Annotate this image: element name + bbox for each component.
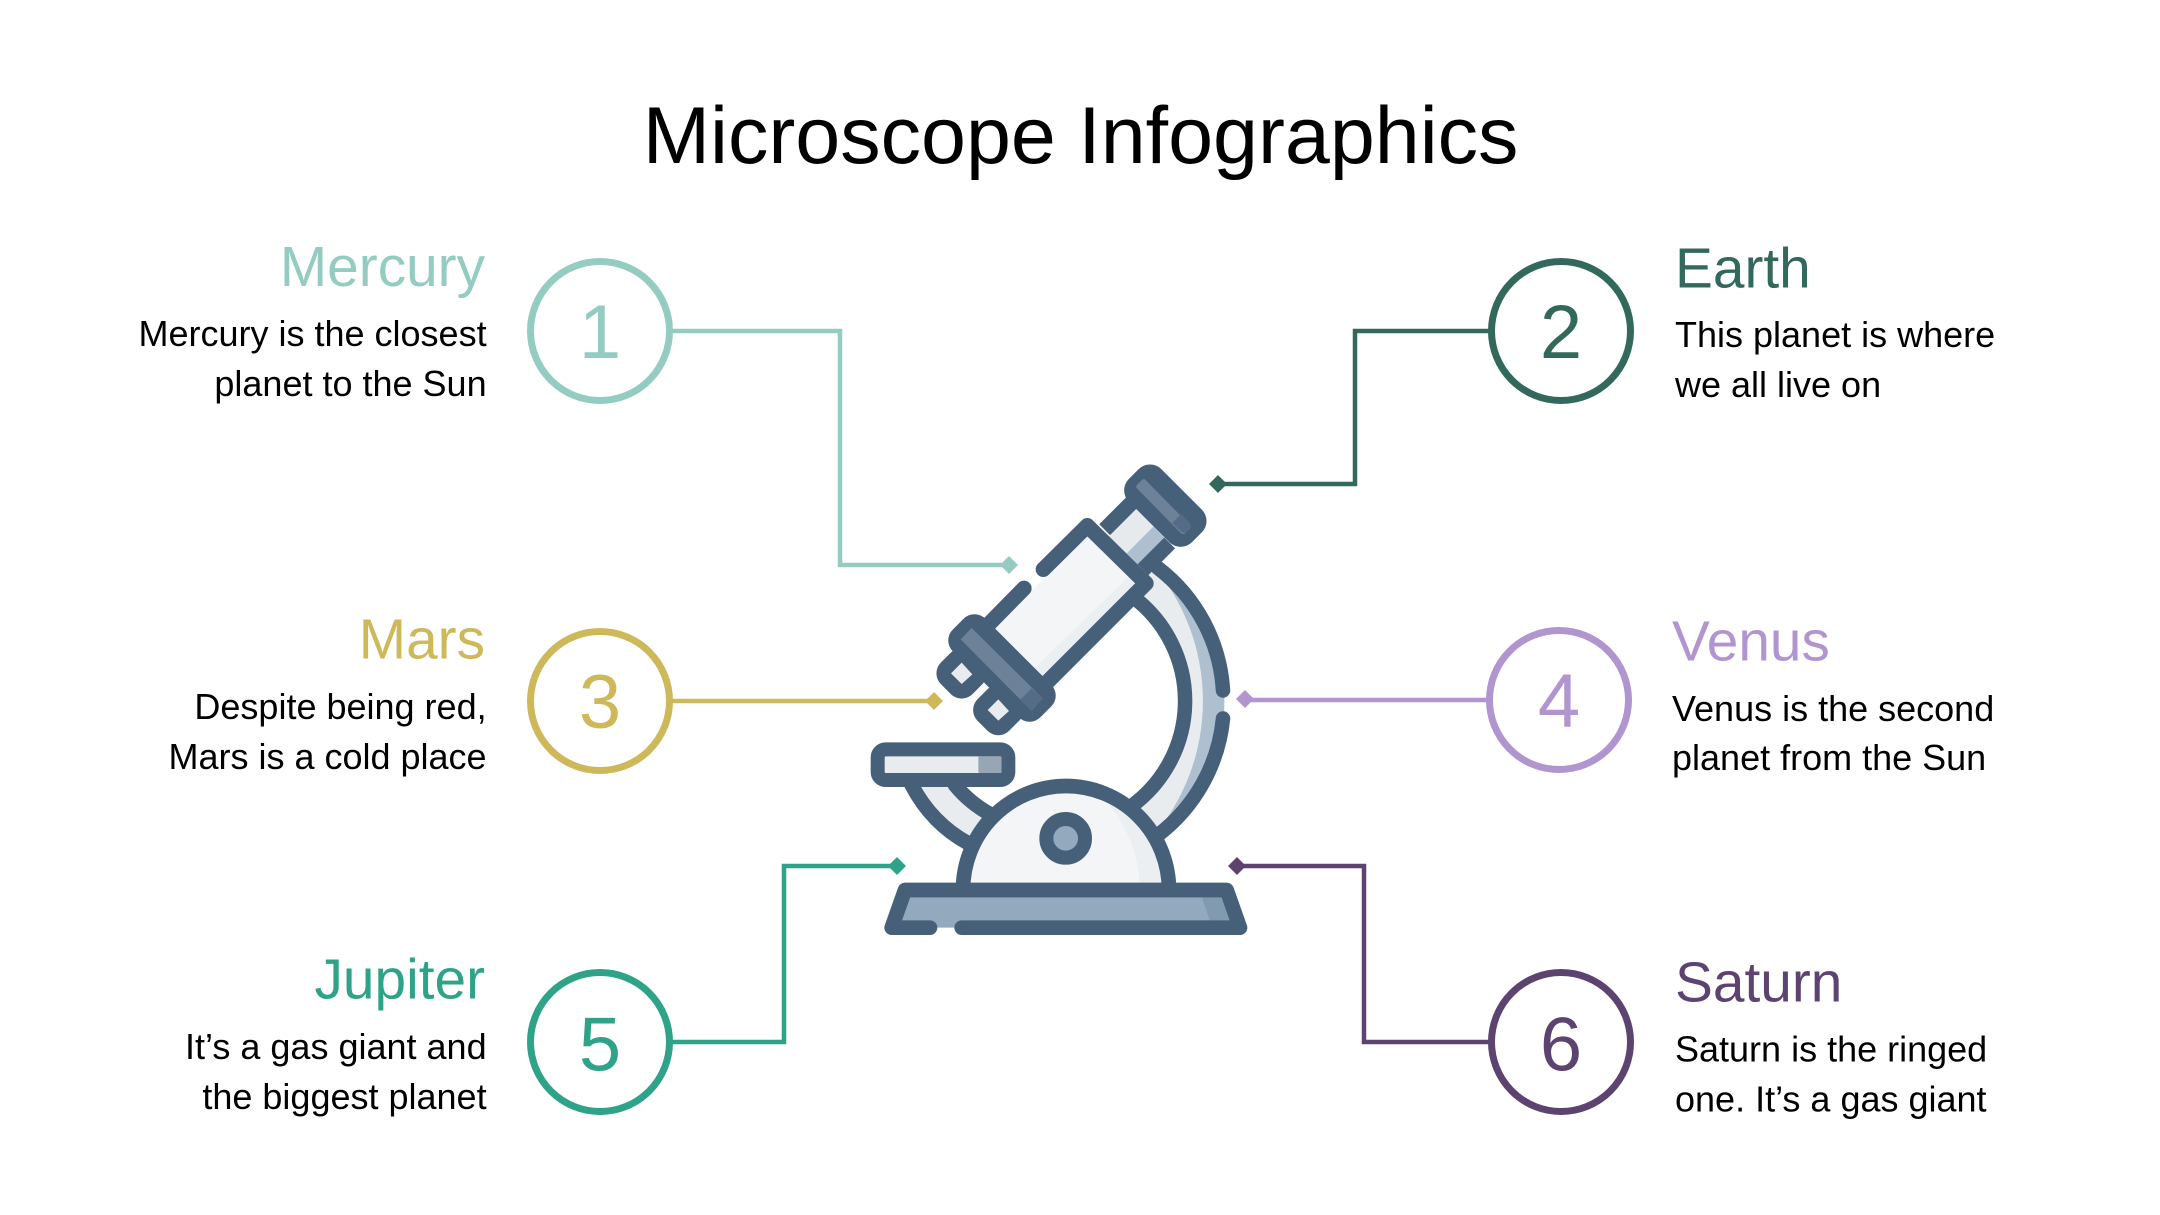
panel: Saturn (1228, 857, 1987, 1120)
eyepiece (1117, 458, 1213, 554)
text: Mars description: Mars is a cold place (168, 736, 487, 777)
panel: Venus (1236, 610, 1994, 778)
heading: Saturn: Saturn (1675, 952, 1842, 1014)
panel: Mercury (138, 236, 1018, 574)
connector 6 (1228, 857, 1491, 1042)
text: Mars description: Despite being red, (194, 686, 487, 727)
connector 3 (672, 692, 943, 710)
base (892, 890, 1240, 928)
objective lenses (930, 642, 1030, 742)
text: Earth description: we all live on (1674, 364, 1881, 405)
connector 2 (1209, 331, 1491, 493)
number circle 3: 3 (579, 660, 621, 745)
heading: Jupiter: Jupiter (315, 948, 485, 1012)
text: Mercury description: planet to the Sun (214, 363, 487, 404)
objective band (942, 608, 1062, 728)
neck (1105, 503, 1170, 570)
text: Venus description: planet from the Sun (1672, 737, 1986, 778)
number circle 1: 1 (579, 290, 621, 375)
panel: Earth (1209, 238, 1995, 493)
heading: Mercury: Mercury (280, 236, 486, 299)
number circle 2: 2 (1540, 290, 1582, 375)
heading: Mars: Mars (359, 608, 485, 672)
connector 5 (672, 857, 906, 1042)
text: Saturn description: Saturn is the ringed (1675, 1028, 1987, 1070)
text: Earth description: This planet is where (1675, 314, 1995, 355)
number circle 2 (1492, 262, 1630, 400)
number circle 5: 5 (579, 1002, 621, 1088)
heading: Earth: Earth (1675, 238, 1811, 300)
number circle 4: 4 (1538, 659, 1580, 744)
tube (989, 526, 1146, 683)
text: Jupiter description: the biggest planet (202, 1076, 487, 1117)
stage arm (912, 785, 992, 843)
number circle 5 (530, 972, 670, 1112)
number circle 1 (530, 262, 670, 400)
heading: Venus: Venus (1672, 610, 1830, 674)
text: Saturn description: one. It’s a gas giant (1675, 1078, 1987, 1120)
microscope lower parts (878, 749, 1240, 928)
microscope arm (1133, 562, 1224, 840)
dome (963, 786, 1169, 890)
connector 1 (672, 331, 1018, 574)
number circle 3 (530, 632, 670, 770)
text: Jupiter description: It’s a gas giant and (185, 1026, 487, 1067)
panel: Jupiter (185, 857, 906, 1117)
number circle 6: 6 (1540, 1002, 1582, 1088)
text: Mercury description: Mercury is the closest (138, 313, 487, 354)
number circle 4 (1490, 630, 1628, 770)
title: Microscope Infographics (643, 91, 1518, 181)
panel: Mars (168, 608, 943, 777)
stage (878, 749, 1008, 780)
icon: microscope (878, 458, 1240, 928)
connector 4 (1236, 690, 1489, 708)
microscope upper parts (930, 458, 1213, 742)
number circle 6 (1492, 972, 1630, 1112)
text: Venus description: Venus is the second (1672, 688, 1994, 729)
